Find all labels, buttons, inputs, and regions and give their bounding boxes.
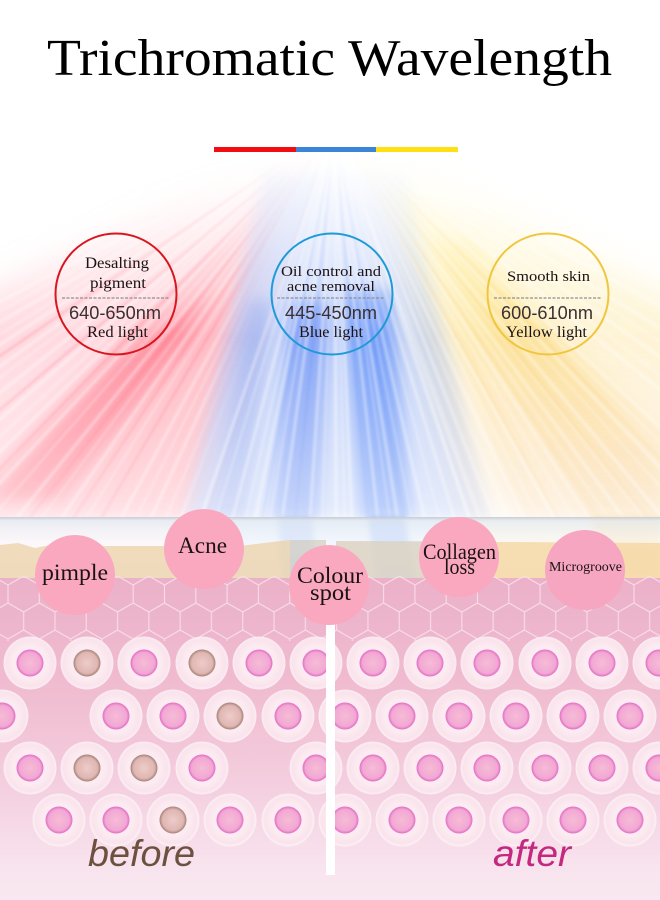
callout: red light: 640-650nm [69,303,161,323]
bubble: microgroove [545,530,625,610]
bubble: pimple: pimple [42,560,108,585]
skin surface tints and rays showing through [0,517,660,580]
callout: yellow light: Smooth skin [507,269,591,285]
skin cells: before side [0,636,342,846]
bubble: colour spot: Colour [297,563,363,588]
skin surface haze [0,517,660,580]
hexagon cell pattern [0,576,660,641]
callout: blue light: Blue light [299,324,364,341]
bubble: colour spot: spot [310,580,352,605]
bubble: acne [164,509,244,589]
label: before: before [88,833,195,874]
bubble: pimple [35,535,115,615]
callout: yellow light [488,234,608,354]
bubble: colour spot [289,545,369,625]
bubble: collagen loss [419,517,499,597]
before/after divider [326,620,335,875]
bubble: acne: Acne [178,533,227,558]
callout: yellow light: 600-610nm [501,303,593,323]
yellow ray fan [373,183,660,517]
callout: blue light: acne removal [287,279,375,295]
light rays fanning down from the colour bar [0,174,660,517]
tan epidermis band [0,540,660,578]
skin cells: after side [318,636,660,846]
title: Trichromatic Wavelength [47,30,612,87]
bubble: collagen loss: Collagen [423,539,496,564]
callout: red light: Desalting [85,255,149,272]
red ray fan [0,182,284,517]
pink dermis [0,578,660,900]
callout: yellow light: Yellow light [506,324,588,341]
bubble: microgroove: Microgroove [549,559,622,574]
callout: blue light [272,234,392,354]
callout: blue light: Oil control and [281,264,382,280]
callout: red light: Red light [87,324,149,341]
label: after: after [493,833,573,874]
callout: blue light: 445-450nm [285,303,377,323]
panel: skin cross-section [0,517,660,900]
colour bar: red, blue, yellow [214,147,458,152]
blue ray fan [184,178,489,517]
callout: red light [56,234,176,354]
callout: red light: pigment [90,275,147,292]
bubble: collagen loss: loss [444,554,475,579]
